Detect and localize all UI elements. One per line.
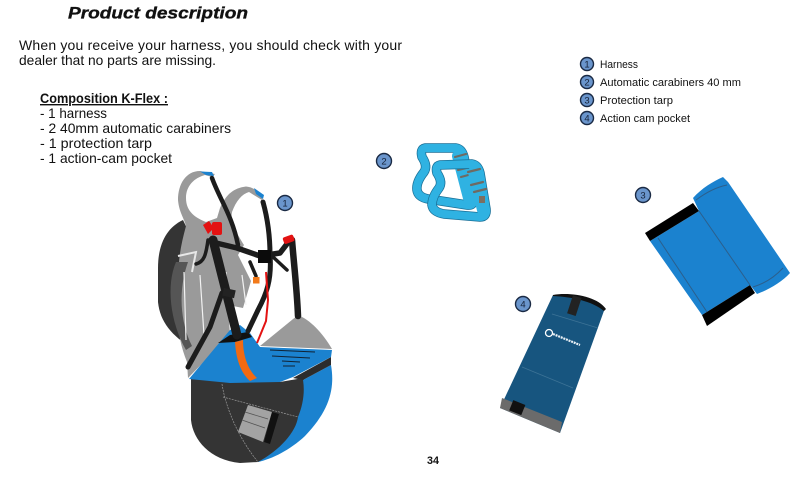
protection tarp [645, 177, 790, 326]
composition list [40, 90, 231, 166]
orange toggle [253, 277, 260, 284]
legend: Harness [600, 59, 638, 71]
legend: 4 [584, 114, 590, 124]
pocket logo [546, 330, 580, 345]
composition list: - 1 protection tarp [40, 135, 152, 151]
buckles and red parts [258, 250, 271, 263]
legend: 2 [584, 78, 590, 88]
badge 4 [516, 296, 530, 312]
composition list: - 1 action-cam pocket [40, 150, 172, 166]
action cam pocket [500, 294, 606, 433]
badge 2 [376, 154, 392, 168]
intro text [19, 37, 402, 68]
intro text: dealer that no parts are missing. [19, 52, 216, 68]
legend: Action cam pocket [600, 113, 690, 125]
legend: 3 [584, 96, 590, 106]
badge 4: 4 [520, 300, 526, 310]
harness illustration [158, 171, 332, 463]
composition list: Composition K-Flex : [40, 90, 168, 106]
carabiner back [417, 148, 473, 205]
legend [580, 58, 741, 125]
badge 1: 1 [282, 198, 288, 210]
grey top triangle [260, 315, 332, 349]
page number: 34 [427, 455, 440, 467]
harness back [158, 220, 205, 348]
badge 1 [278, 196, 292, 210]
wing tips [200, 172, 214, 176]
legend: Automatic carabiners 40 mm [600, 77, 741, 89]
badge 2: 2 [381, 156, 387, 168]
straps [188, 178, 298, 367]
legend: 1 [584, 60, 590, 70]
badge 3 [636, 188, 650, 202]
seat pocket [238, 405, 272, 442]
orange strap [235, 340, 257, 381]
composition list: - 2 40mm automatic carabiners [40, 120, 231, 136]
carabiners [417, 148, 486, 217]
legend: Protection tarp [600, 95, 673, 107]
seat blue top [189, 325, 332, 383]
badge 3: 3 [640, 190, 646, 202]
seat dark shell [191, 378, 320, 463]
seat blue side [258, 365, 332, 462]
composition list: - 1 harness [40, 105, 107, 121]
carabiner front [432, 164, 486, 217]
intro text: When you receive your harness, you should check with your [19, 37, 402, 53]
title: Product description [68, 4, 248, 22]
